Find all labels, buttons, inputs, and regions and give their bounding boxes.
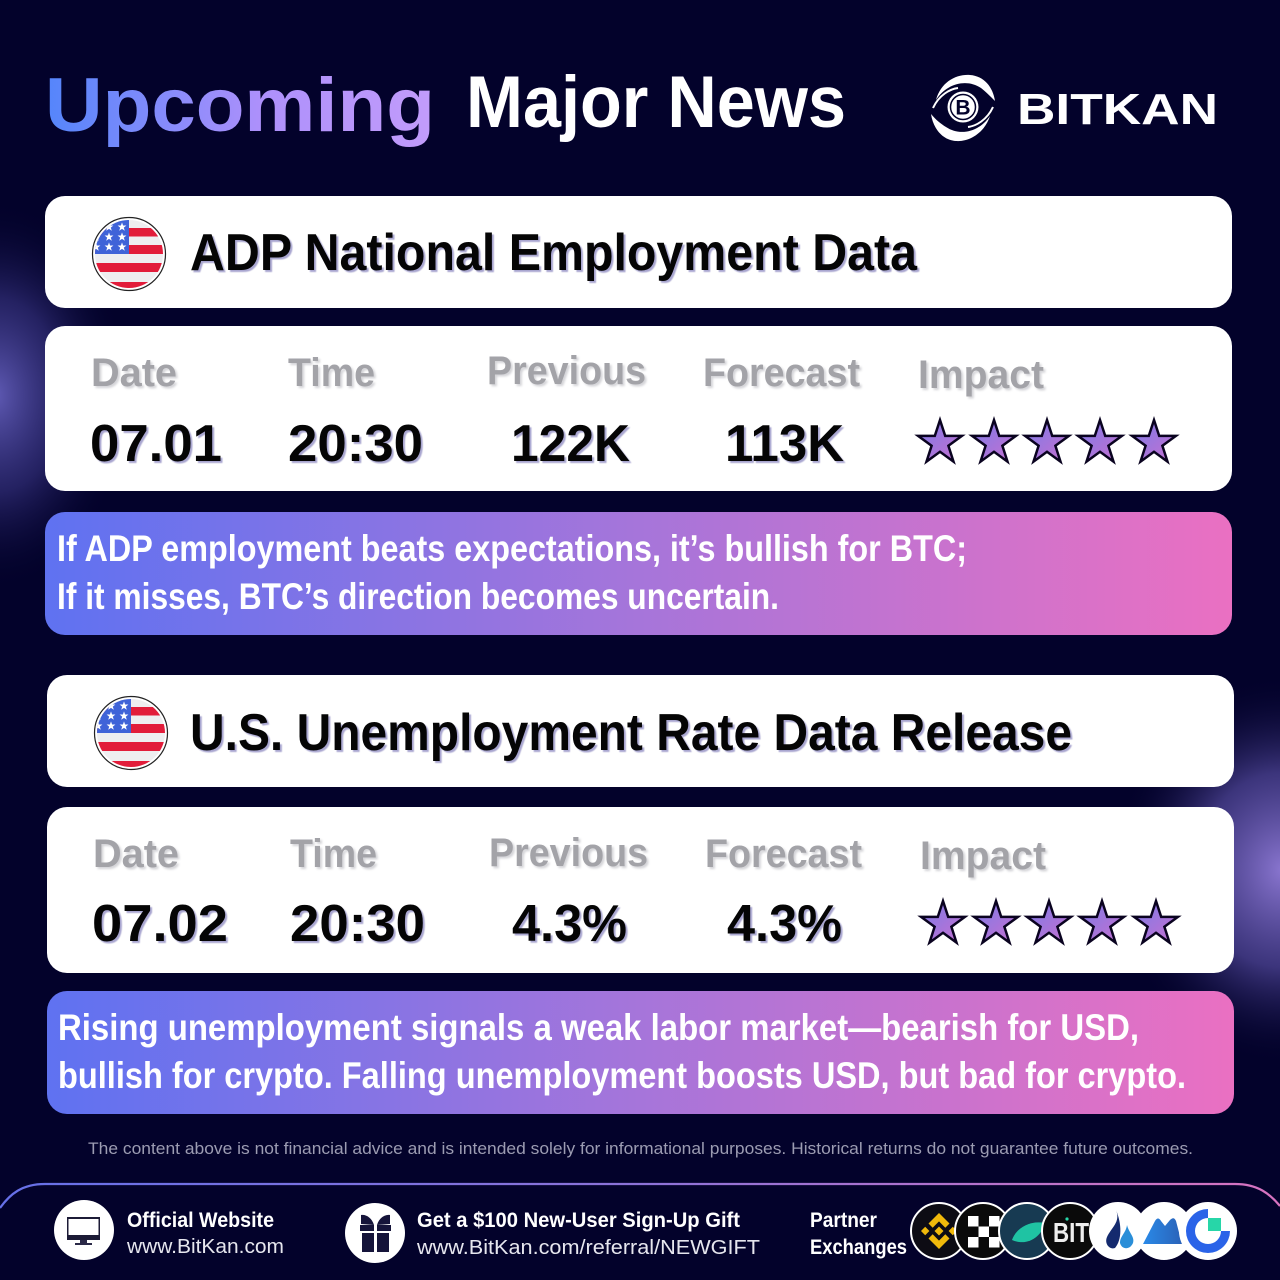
column values: 07.02: [92, 895, 228, 953]
column values: 122K: [511, 415, 630, 473]
title: Major News: [466, 62, 846, 143]
footer: official website: www.BitKan.com: [126, 1236, 284, 1258]
column labels: Impact: [918, 353, 1044, 397]
column labels: Time: [288, 351, 375, 395]
disclaimer: The content above is not financial advice and is intended solely for informational purposes. Historical returns do not guarantee future outcomes.: [88, 1139, 1193, 1158]
column labels: Date: [91, 351, 177, 395]
heading: ADP: ADP National Employment Data: [190, 224, 918, 282]
footer: partner exchanges label: Exchanges: [810, 1236, 907, 1259]
column values: 113K: [725, 415, 844, 473]
column values: [90, 415, 844, 473]
column values: 20:30: [288, 415, 423, 473]
column labels: Forecast: [705, 832, 862, 876]
partner logos: [911, 1202, 1237, 1260]
column labels: Date: [93, 832, 179, 876]
icon: US flag: [92, 218, 166, 290]
logo: BitKan: B: [955, 96, 971, 120]
icon: monitor: [54, 1200, 114, 1260]
title: [45, 62, 846, 148]
column labels: Previous: [489, 831, 648, 875]
footer: official website: Official Website: [127, 1209, 274, 1232]
logo: Binance: [911, 1203, 967, 1259]
callout: unemployment: Rising unemployment signals a weak labor market—bearish for USD,: [58, 1007, 1139, 1048]
logo: OKX: [955, 1203, 1011, 1259]
footer: partner exchanges label: [810, 1209, 907, 1259]
footer: official website: [54, 1200, 284, 1260]
logo: BitKan: BITKAN: [1017, 85, 1218, 134]
column labels: Impact: [920, 834, 1046, 878]
heading: unemployment: U.S. Unemployment Rate Data Release: [190, 704, 1072, 762]
callout: unemployment: [47, 991, 1234, 1114]
column values: 20:30: [290, 895, 425, 953]
panel: ADP heading: [45, 196, 1232, 308]
column labels: Time: [290, 832, 377, 876]
callout: ADP: [45, 512, 1232, 635]
callout: ADP: If ADP employment beats expectations, it’s bullish for BTC;: [57, 528, 967, 569]
icon: gift: [345, 1203, 405, 1263]
logo: BitKan: [931, 75, 1218, 141]
column labels: [91, 349, 1044, 397]
logo: mountain: [1135, 1202, 1193, 1260]
logo: BIT: BIT: [1053, 1217, 1089, 1248]
footer line: [0, 1184, 1280, 1208]
column labels: [93, 831, 1046, 878]
footer: sign-up gift: www.BitKan.com/referral/NEWGIFT: [416, 1237, 760, 1259]
panel: unemployment heading: [47, 675, 1234, 787]
panel: ADP data: [45, 326, 1232, 491]
impact stars: [918, 420, 1176, 462]
logo: Bitget: [999, 1203, 1055, 1259]
callout: ADP: If it misses, BTC’s direction becomes uncertain.: [57, 576, 779, 617]
footer: sign-up gift: [345, 1203, 760, 1263]
column values: 4.3%: [727, 895, 842, 953]
column labels: Previous: [487, 349, 646, 393]
logo: Gate: [1179, 1202, 1237, 1260]
logo: Huobi: [1089, 1202, 1147, 1260]
panel: unemployment data: [47, 807, 1234, 973]
footer: sign-up gift: Get a $100 New-User Sign-Up Gift: [417, 1209, 740, 1232]
column values: 07.01: [90, 415, 222, 473]
column values: 4.3%: [512, 895, 627, 953]
column values: [92, 895, 842, 953]
title: Upcoming: [45, 63, 435, 148]
icon: US flag: [94, 696, 168, 770]
impact stars: [921, 901, 1178, 943]
footer: partner exchanges label: Partner: [810, 1209, 877, 1232]
logo: BIT: [1042, 1203, 1098, 1259]
column labels: Forecast: [703, 351, 860, 395]
